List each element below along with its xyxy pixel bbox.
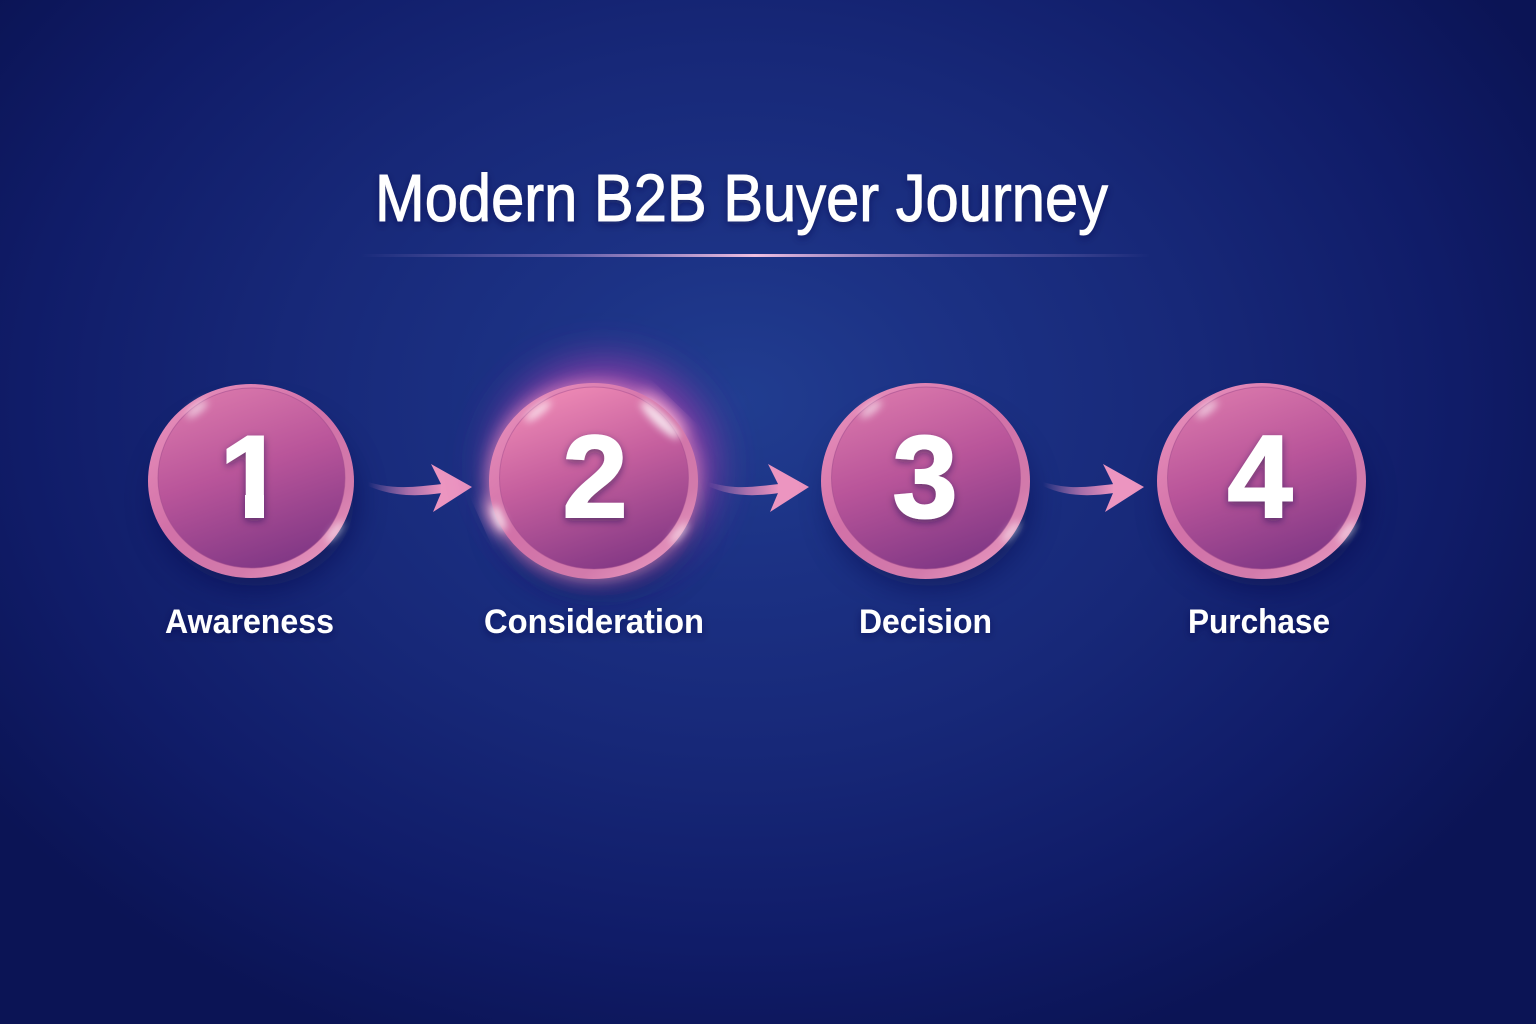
arrow 3 to 4	[1043, 464, 1144, 512]
label: consideration: Consideration	[484, 603, 704, 641]
label: awareness: Awareness	[165, 603, 334, 641]
step 1: awareness	[148, 384, 354, 641]
number 4: 4	[1227, 411, 1293, 542]
step 2: consideration (highlighted)	[474, 342, 734, 641]
number 1: 1	[219, 411, 285, 542]
number 1	[222, 434, 269, 526]
label: decision: Decision	[859, 603, 992, 641]
number 3: 3	[892, 411, 958, 542]
arrow 2 to 3	[708, 464, 809, 512]
step 3: decision	[821, 383, 1030, 641]
number 2: 2	[562, 411, 628, 542]
step 4: purchase	[1157, 383, 1366, 641]
title underline	[360, 254, 1150, 257]
title: Modern B2B Buyer Journey	[375, 161, 1108, 236]
arrow 1 to 2	[368, 464, 472, 512]
label: purchase: Purchase	[1188, 603, 1330, 641]
